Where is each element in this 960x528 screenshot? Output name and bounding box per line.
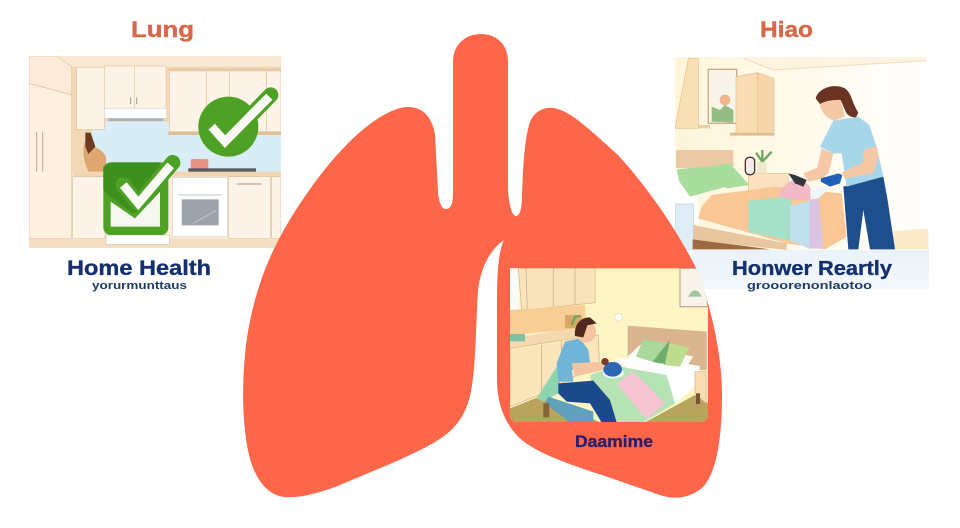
right panel: subtitle: grooorenonlaotoo (747, 280, 872, 292)
right panel: bedroom illustration (675, 57, 932, 250)
left panel: title: Home Health (67, 257, 211, 280)
right panel: caption band (692, 250, 929, 289)
right panel: heading: Hiao (760, 17, 813, 42)
left panel: kitchen illustration (29, 56, 281, 248)
icon: round green check (198, 95, 271, 157)
left panel: subtitle: yorurmunttaus (92, 280, 187, 292)
lung panel: bedroom illustration with man (510, 268, 708, 423)
icon: green checkbox (103, 162, 173, 235)
lung shape (243, 34, 722, 498)
right panel: title: Honwer Reartly (732, 258, 893, 280)
lung panel: caption: Daamime (575, 432, 653, 451)
left panel: kitchen heading: Lung (131, 17, 194, 42)
